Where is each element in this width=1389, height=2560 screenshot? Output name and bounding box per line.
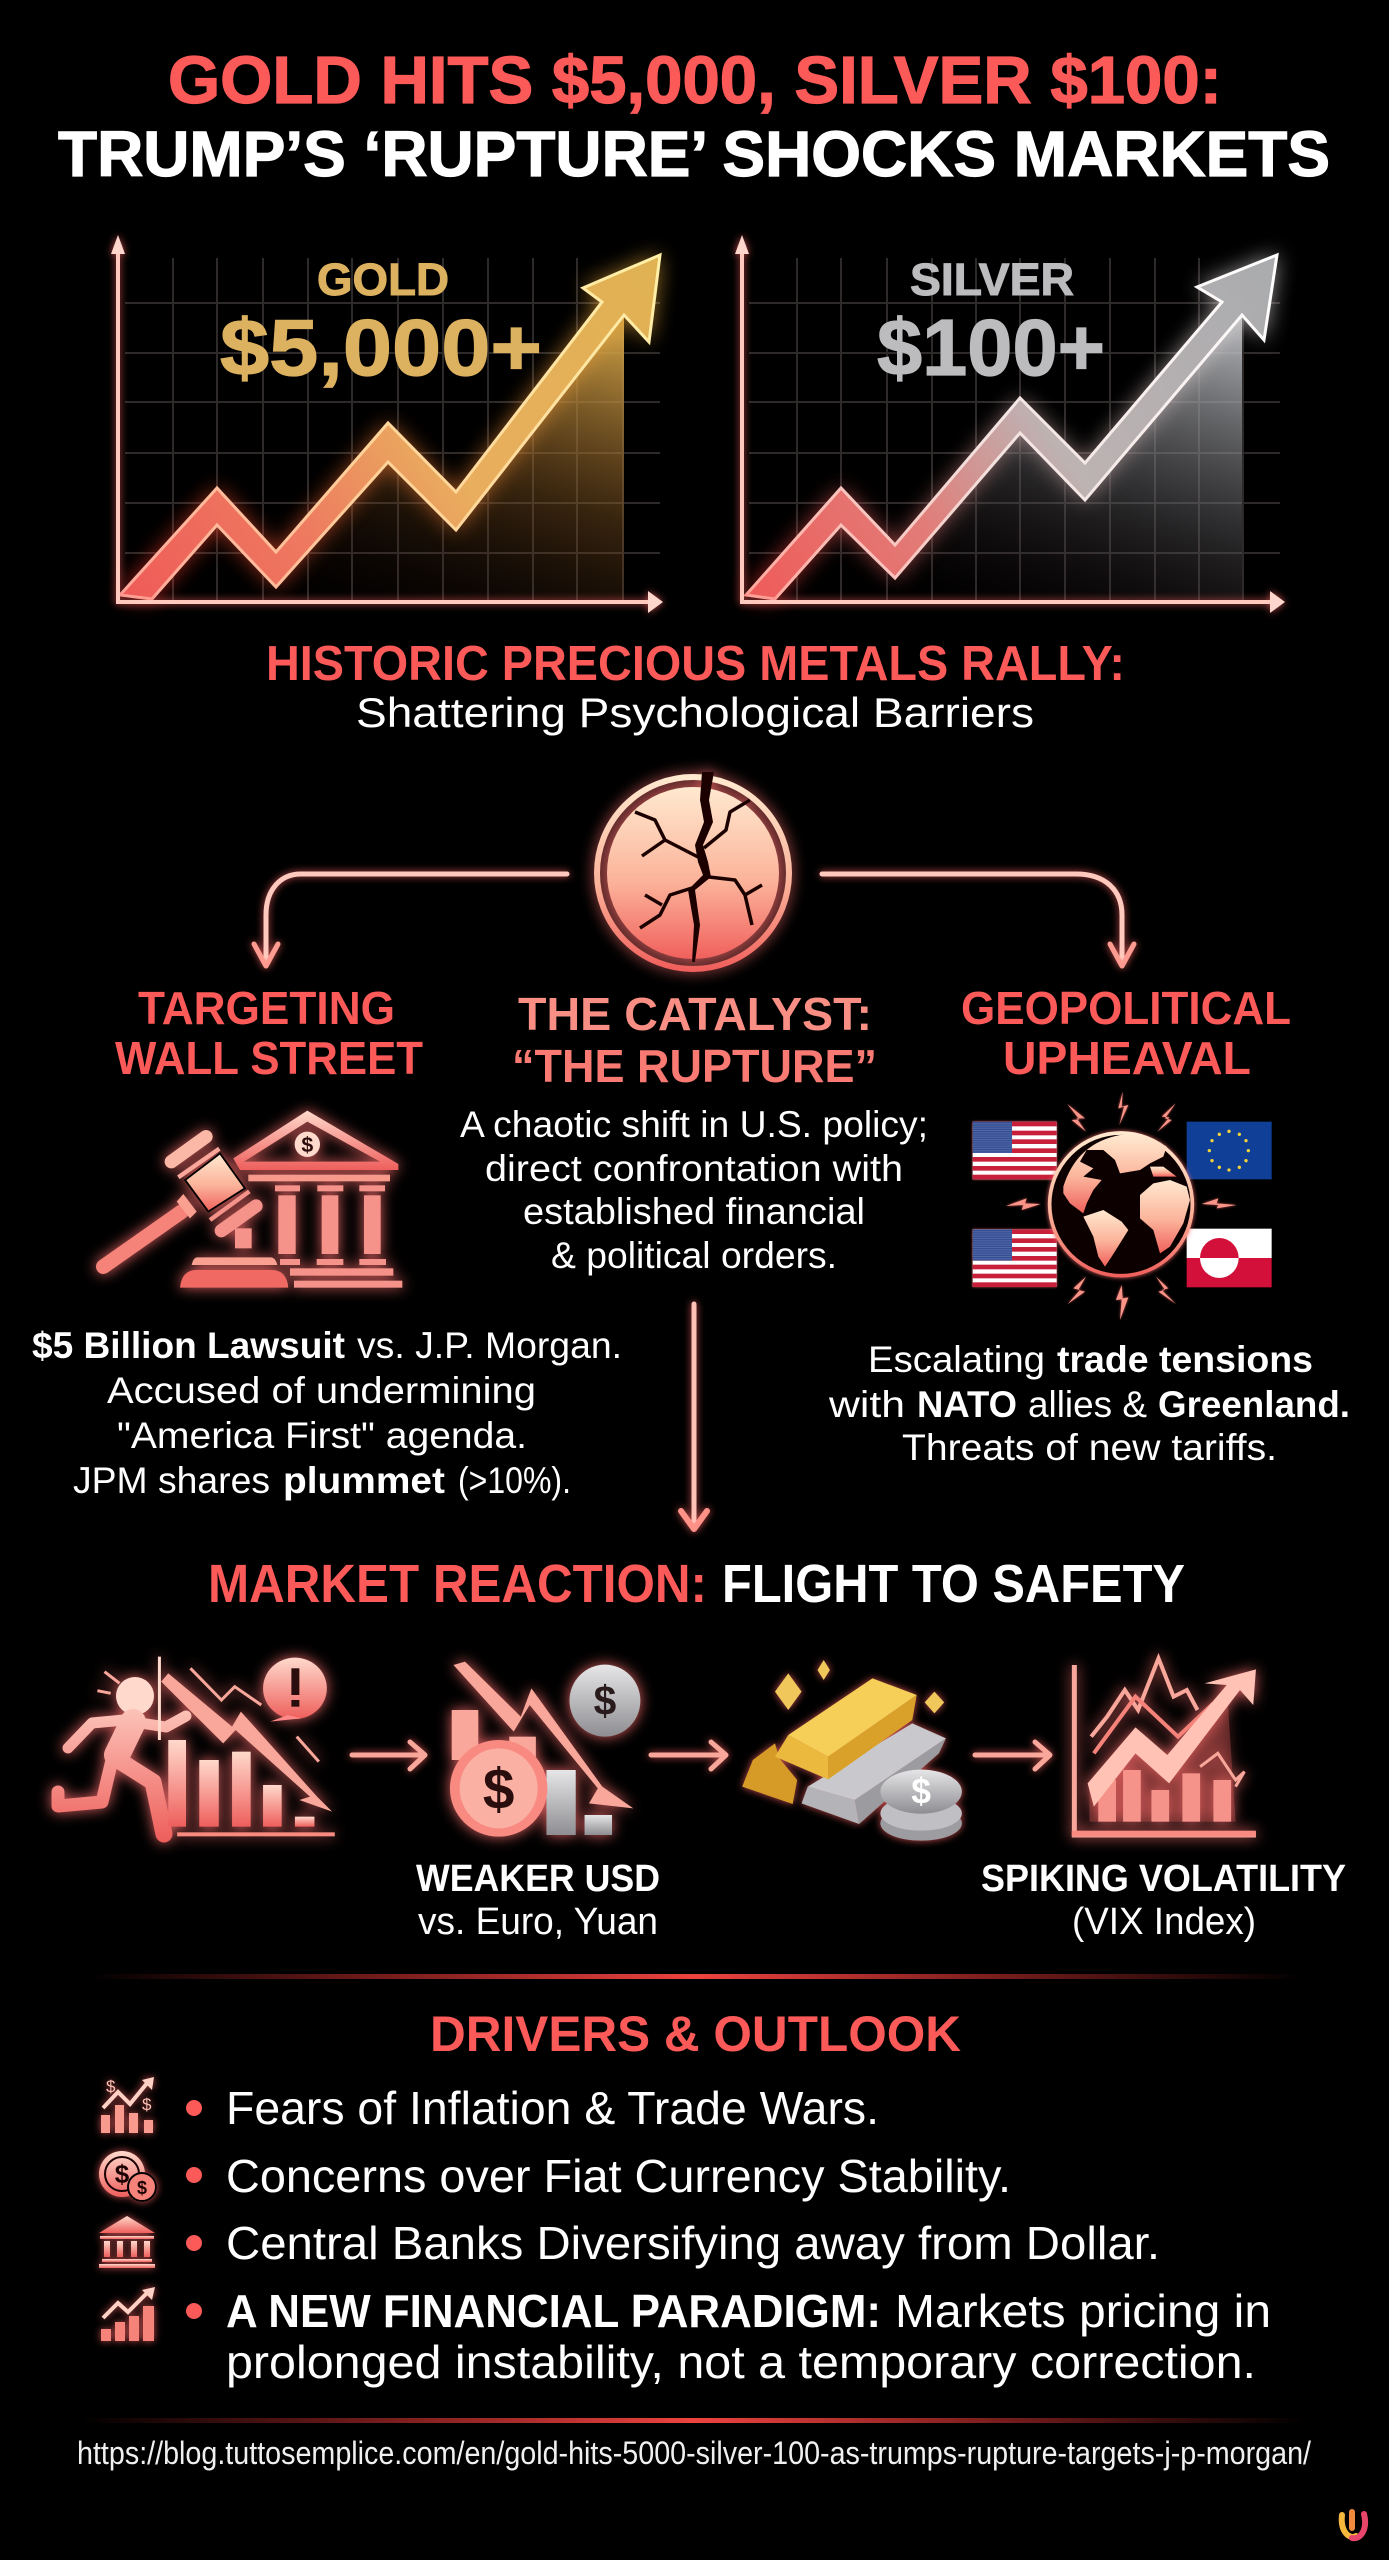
heading: precious metals rally xyxy=(266,637,1125,736)
label: spiking volatility: SPIKING VOLATILITY xyxy=(981,1858,1346,1900)
arrow: step 3 xyxy=(975,1742,1050,1769)
icon: weaker dollar xyxy=(450,1662,640,1837)
icon: spiking volatility chart xyxy=(1072,1658,1256,1837)
bullet list: A NEW FINANCIAL PARADIGM: xyxy=(226,2285,881,2337)
heading: the catalyst xyxy=(512,988,877,1092)
icon: brand logo xyxy=(1342,2512,1365,2538)
gold label: $5,000+ xyxy=(220,303,542,392)
text: lawsuit: (>10%). xyxy=(458,1460,571,1501)
bullet list xyxy=(186,2082,1271,2388)
silver label xyxy=(877,254,1105,392)
text: catalyst description: direct confrontation with xyxy=(485,1148,903,1189)
text: lawsuit xyxy=(32,1325,622,1501)
text: lawsuit: JPM shares xyxy=(73,1460,270,1501)
text: lawsuit: "America First" agenda. xyxy=(117,1415,527,1456)
heading: the catalyst: “THE RUPTURE” xyxy=(512,1040,877,1092)
text: trade tensions: Threats of new tariffs. xyxy=(902,1427,1277,1468)
bullet list: prolonged instability, not a temporary correction. xyxy=(226,2336,1256,2388)
text: lawsuit: Accused of undermining xyxy=(107,1370,536,1411)
bullet list: Fears of Inflation & Trade Wars. xyxy=(226,2082,879,2134)
text: catalyst description xyxy=(460,1104,928,1276)
icon: running figure and falling chart xyxy=(58,1657,335,1836)
heading: targeting wall street: TARGETING xyxy=(138,982,395,1034)
title xyxy=(58,43,1330,190)
icon: inflation chart: $ xyxy=(106,2077,116,2096)
icon: rising chart xyxy=(101,2287,155,2341)
icon: globe with flags xyxy=(973,1092,1272,1320)
icon: gavel and bank: $ xyxy=(301,1133,313,1157)
flag: USA bottom xyxy=(973,1229,1057,1287)
text: trade tensions: Greenland. xyxy=(1158,1384,1350,1425)
text: lawsuit: $5 Billion Lawsuit xyxy=(32,1325,345,1366)
heading: targeting wall street: WALL STREET xyxy=(115,1032,423,1084)
icon: weaker dollar: $ xyxy=(594,1678,616,1724)
text: lawsuit: vs. J.P. Morgan. xyxy=(357,1325,622,1366)
arrow: right branch xyxy=(822,874,1134,966)
icon: fiat coins: $ xyxy=(115,2159,130,2189)
icon: gold and silver bars: $ xyxy=(911,1771,931,1811)
flag: Greenland xyxy=(1187,1229,1272,1287)
icon: inflation chart: $ xyxy=(142,2095,152,2114)
bullet list: Central Banks Diversifying away from Dollar. xyxy=(226,2217,1160,2269)
flag: USA top xyxy=(973,1122,1057,1179)
arrow: step 2 xyxy=(651,1742,726,1769)
gold label: GOLD xyxy=(317,254,449,305)
heading: geopolitical upheaval: GEOPOLITICAL xyxy=(961,982,1291,1034)
text: trade tensions: NATO xyxy=(917,1384,1017,1425)
silver label: $100+ xyxy=(877,303,1105,392)
heading: market reaction: MARKET REACTION: xyxy=(208,1554,707,1614)
arrow: left branch xyxy=(254,874,567,966)
title: GOLD HITS $5,000, SILVER $100: xyxy=(168,43,1222,118)
chart: gold xyxy=(111,235,663,613)
text: trade tensions xyxy=(828,1339,1350,1468)
heading: market reaction xyxy=(208,1554,1185,1614)
silver label: SILVER xyxy=(910,254,1074,305)
flag: EU xyxy=(1187,1122,1272,1179)
icon: fiat coins xyxy=(99,2151,156,2201)
text: catalyst description: A chaotic shift in U.S. policy; xyxy=(460,1104,928,1145)
text: trade tensions: trade tensions xyxy=(1057,1339,1313,1380)
heading: geopolitical upheaval: UPHEAVAL xyxy=(1003,1032,1251,1084)
heading: market reaction: FLIGHT TO SAFETY xyxy=(722,1554,1185,1614)
heading: geopolitical upheaval xyxy=(961,982,1291,1084)
icon: inflation chart xyxy=(101,2077,154,2133)
text: trade tensions: Escalating xyxy=(868,1339,1045,1380)
heading: the catalyst: THE CATALYST: xyxy=(518,988,872,1040)
bullet list: Concerns over Fiat Currency Stability. xyxy=(226,2150,1011,2202)
label: spiking volatility: (VIX Index) xyxy=(1072,1901,1256,1943)
arrow: step 1 xyxy=(352,1742,425,1769)
heading: targeting wall street xyxy=(115,982,423,1084)
bullet list: Markets pricing in xyxy=(895,2285,1271,2337)
heading: precious metals rally: HISTORIC PRECIOUS METALS RALLY: xyxy=(266,637,1125,691)
globe xyxy=(1048,1132,1194,1277)
text: catalyst description: established financial xyxy=(523,1191,865,1232)
icon: fiat coins: $ xyxy=(137,2178,147,2198)
icon: cracked circle xyxy=(597,772,789,969)
text: trade tensions: with xyxy=(828,1384,905,1425)
label: weaker usd: vs. Euro, Yuan xyxy=(418,1901,658,1943)
label: weaker usd: WEAKER USD xyxy=(416,1858,660,1900)
heading: drivers and outlook: DRIVERS & OUTLOOK xyxy=(430,2006,961,2062)
text: catalyst description: & political orders. xyxy=(551,1235,837,1276)
label: spiking volatility xyxy=(981,1858,1346,1943)
title: TRUMP’S ‘RUPTURE’ SHOCKS MARKETS xyxy=(58,118,1330,190)
text: lawsuit: plummet xyxy=(283,1460,445,1501)
text: trade tensions: allies & xyxy=(1028,1384,1147,1425)
bolts xyxy=(1006,1092,1237,1320)
label: weaker usd xyxy=(416,1858,660,1943)
gavel xyxy=(103,1137,267,1267)
gold label xyxy=(220,254,542,392)
icon: weaker dollar: $ xyxy=(483,1757,514,1821)
heading: precious metals rally: Shattering Psychological Barriers xyxy=(356,689,1034,736)
icon: gold and silver bars xyxy=(742,1660,962,1841)
icon: gavel and bank xyxy=(103,1111,402,1288)
chart: silver xyxy=(735,235,1285,613)
icon: central bank xyxy=(99,2216,155,2268)
arrow: down to market reaction xyxy=(681,1304,707,1529)
